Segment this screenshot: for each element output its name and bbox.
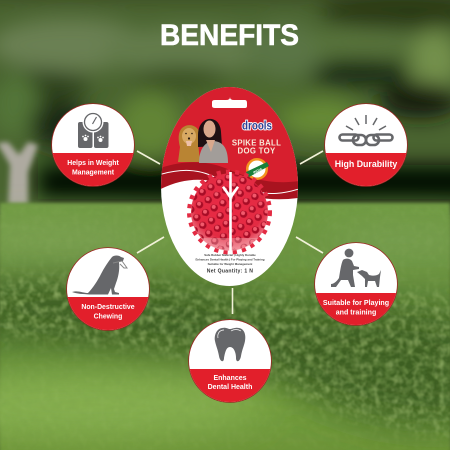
product package: spike ball dog toy	[161, 87, 298, 286]
badge: suitable for playing and training: Suitable for Playing	[323, 299, 389, 307]
tree trunk	[0, 142, 38, 205]
title: BENEFITS	[160, 19, 299, 52]
product name: SPIKE BALL	[232, 138, 281, 148]
badge: high durability: High Durability	[335, 159, 397, 169]
package small print: Net Quantity: 1 N	[207, 268, 253, 274]
ball strap	[222, 172, 239, 256]
badge: suitable for playing and training: and training	[336, 308, 376, 316]
wave band	[155, 162, 305, 199]
badge: helps in weight management: Helps in Weight	[67, 160, 119, 167]
package small print: Safe Rubber Material | Highly Durable	[204, 253, 256, 257]
badge: non-destructive chewing: Non-Destructive	[81, 304, 135, 311]
grass lawn background	[0, 203, 450, 450]
package small print	[195, 253, 265, 274]
blurred trees background	[0, 0, 450, 215]
package small print: Enhances Dental Health | For Playing and Training	[195, 258, 265, 262]
badge: non-destructive chewing	[66, 247, 150, 332]
connector lines	[137, 151, 323, 314]
red header	[161, 87, 298, 191]
icon: weighing scale with paws	[78, 112, 108, 148]
package small print: Suitable for Weight Management	[208, 262, 252, 266]
badge: enhances dental health: Enhances	[213, 375, 247, 382]
woman	[198, 119, 228, 163]
hang hole	[212, 97, 247, 108]
product name: DOG TOY	[238, 146, 276, 156]
golden retriever	[178, 125, 200, 162]
made in india badge	[246, 158, 269, 180]
spiked rubber ball	[190, 172, 270, 258]
badge: suitable for playing and training	[314, 242, 398, 328]
icon: tooth	[215, 328, 245, 361]
icon: sitting dog with toy	[72, 256, 127, 294]
badge: helps in weight management: Management	[72, 170, 115, 176]
product name	[232, 138, 281, 156]
made in india badge: INDIA	[253, 167, 264, 175]
badge: enhances dental health: Dental Health	[208, 384, 252, 391]
badge: non-destructive chewing: Chewing	[94, 314, 122, 320]
badge: helps in weight management	[51, 103, 135, 188]
icon: person training a dog	[331, 249, 381, 287]
badge: enhances dental health	[188, 319, 272, 404]
badge: high durability	[324, 103, 408, 188]
icon: chain with rays	[340, 115, 392, 145]
drools logo: drools	[242, 120, 272, 132]
